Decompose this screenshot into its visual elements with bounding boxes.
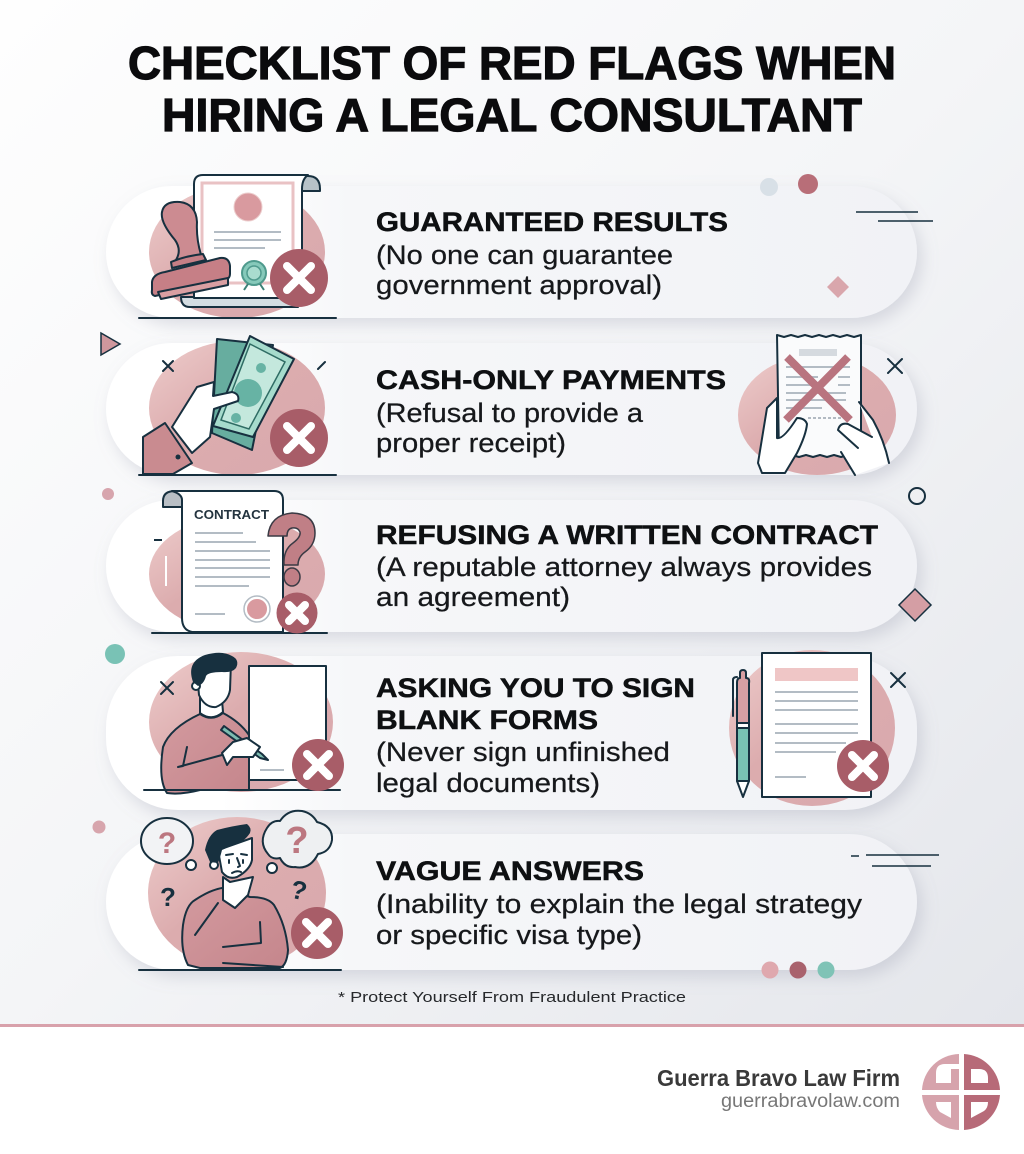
icon: x mark: [161, 682, 173, 694]
icon: crossed receipt in hands: [738, 335, 902, 475]
icon: confused person: ?: [285, 820, 309, 862]
icon: contract with question mark: [149, 491, 327, 634]
icon: contract with question mark: CONTRACT: [194, 507, 269, 522]
icon: red x badge: [270, 249, 328, 307]
heading: REFUSING A WRITTEN CONTRACT: [376, 520, 879, 550]
icon: x mark: [891, 673, 905, 687]
title: [128, 37, 896, 141]
icon: red x badge: [292, 739, 344, 791]
card background: [106, 500, 917, 632]
heading: GUARANTEED RESULTS: [376, 207, 728, 237]
icon: red x badge: [270, 409, 328, 467]
panel: guaranteed results: [106, 175, 917, 318]
description: legal documents): [376, 768, 600, 798]
icon: red x badge: [291, 907, 343, 959]
title: HIRING A LEGAL CONSULTANT: [162, 89, 862, 141]
firm name: Guerra Bravo Law Firm: [657, 1065, 900, 1091]
firm url: guerrabravolaw.com: [721, 1091, 900, 1112]
icon: certificate and stamp: [139, 175, 336, 318]
decorative shapes: [92, 174, 939, 978]
description: [376, 737, 670, 798]
card background: [106, 656, 917, 810]
description: (Refusal to provide a: [376, 398, 644, 428]
description: or specific visa type): [376, 920, 642, 950]
heading: CASH-ONLY PAYMENTS: [376, 365, 726, 395]
footer: [0, 1024, 1024, 1154]
description: (A reputable attorney always provides: [376, 552, 872, 582]
description: proper receipt): [376, 428, 566, 458]
icon: decorative marks: [163, 361, 325, 371]
icon: confused person: [139, 811, 343, 970]
panel: vague answers: [106, 811, 917, 970]
icon: red x badge: [276, 592, 318, 634]
description: [376, 240, 673, 300]
icon: person signing blank form: [144, 652, 344, 794]
panel: cash-only payments: [106, 335, 917, 475]
card background: [106, 186, 917, 318]
panel: asking you to sign blank forms: [106, 650, 917, 810]
heading: ASKING YOU TO SIGN: [376, 673, 695, 703]
description: an agreement): [376, 582, 570, 612]
panel: refusing a written contract: [106, 491, 917, 634]
logo: [922, 1054, 1000, 1130]
description: [376, 889, 863, 950]
icon: x mark: [888, 359, 902, 373]
heading: VAGUE ANSWERS: [376, 856, 644, 886]
description: (No one can guarantee: [376, 240, 673, 270]
icon: confused person: ?: [160, 882, 176, 912]
heading: [376, 673, 695, 735]
icon: hand with cash: [139, 336, 336, 475]
description: (Never sign unfinished: [376, 737, 670, 767]
icon: confused person: ?: [288, 874, 310, 907]
description: [376, 552, 872, 612]
icon: pen and document: [729, 650, 905, 806]
footnote: * Protect Yourself From Fraudulent Practice: [338, 989, 686, 1006]
icon: red x badge: [837, 740, 889, 792]
card background: [106, 834, 917, 970]
description: (Inability to explain the legal strategy: [376, 889, 863, 919]
card background: [106, 343, 917, 475]
description: [376, 398, 644, 458]
title: CHECKLIST OF RED FLAGS WHEN: [128, 37, 896, 89]
icon: confused person: ?: [158, 827, 176, 860]
heading: BLANK FORMS: [376, 705, 598, 735]
description: government approval): [376, 270, 662, 300]
